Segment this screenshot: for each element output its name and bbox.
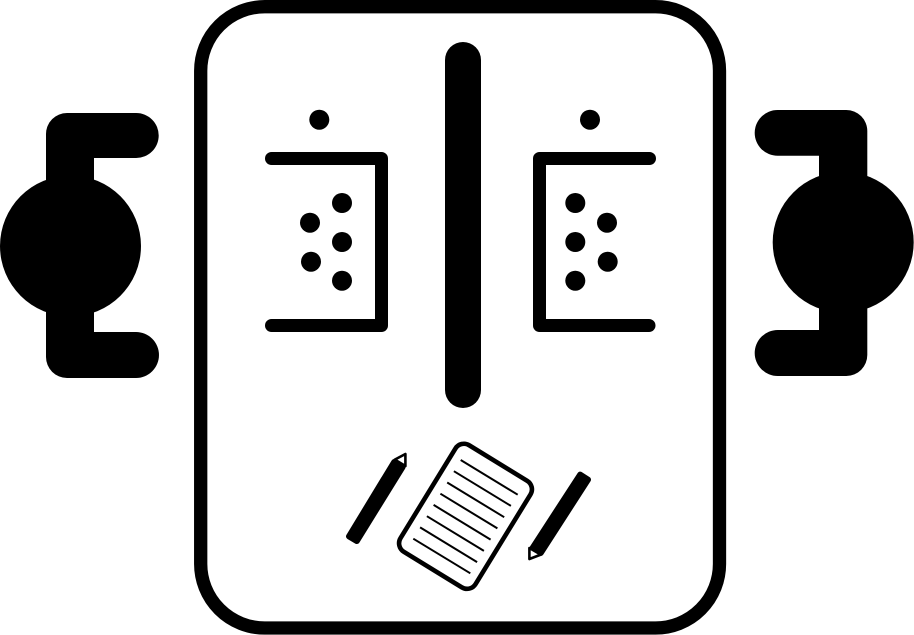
right dots bbox=[565, 110, 618, 291]
icon: notepad bbox=[395, 440, 536, 593]
icon: left pencil bbox=[349, 454, 405, 541]
left bracket bbox=[272, 158, 382, 326]
icon: right pencil bbox=[529, 475, 588, 559]
main rounded frame bbox=[201, 7, 719, 628]
left bracket group bbox=[272, 110, 382, 326]
right bracket bbox=[540, 158, 650, 326]
left dots bbox=[300, 110, 352, 291]
left external component bbox=[0, 113, 159, 378]
central vertical bar bbox=[445, 42, 481, 408]
right external component bbox=[755, 110, 914, 376]
right bracket group bbox=[540, 110, 650, 326]
